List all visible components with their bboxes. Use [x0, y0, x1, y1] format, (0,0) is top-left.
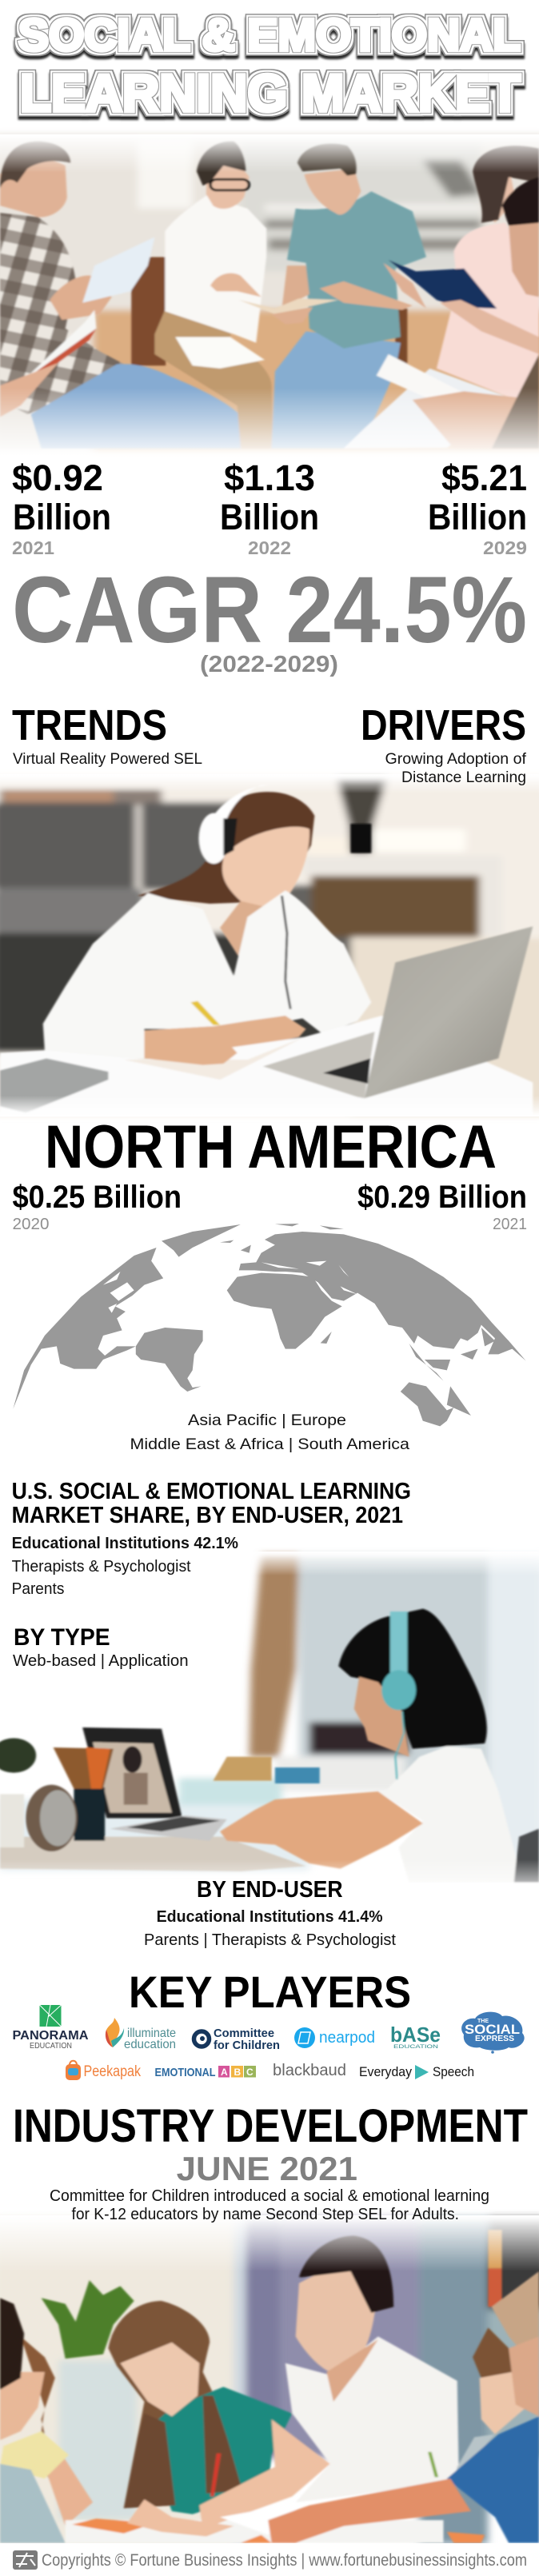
- stat: North America 2021: 2021: [493, 1216, 527, 1233]
- world map: [13, 1224, 526, 1426]
- left man: [0, 213, 138, 414]
- stat: 2022 market size: $1.13: [224, 457, 315, 498]
- stat: North America 2020: 2020: [13, 1216, 50, 1233]
- stat: 2021 market size: [12, 457, 111, 558]
- US share list: Parents: [12, 1580, 64, 1598]
- CAGR period: (2022-2029): [200, 652, 338, 677]
- by type list: Web-based | Application: [13, 1652, 189, 1670]
- stat: 2029 market size: $5.21: [441, 457, 527, 498]
- stat: 2021 market size: Billion: [13, 497, 111, 537]
- centre woman: [154, 310, 273, 449]
- stat: North America 2020: $0.25 Billion: [13, 1180, 182, 1215]
- logo: Emotional ABCs: C: [246, 2067, 254, 2078]
- logo: The Social Express: [461, 2012, 525, 2054]
- trends text: Virtual Reality Powered SEL: [13, 750, 202, 768]
- shirt: [43, 890, 371, 1061]
- US share list: Therapists & Psychologist: [12, 1558, 191, 1576]
- logo: Everyday Speech: Everyday: [359, 2064, 412, 2079]
- logo: Peekapak: [66, 2061, 141, 2080]
- stat: 2022 market size: 2022: [248, 537, 291, 558]
- logo: Illuminate Education: education: [124, 2038, 176, 2051]
- logo: Panorama Education: [13, 2005, 88, 2051]
- logo: The Social Express: EXPRESS: [475, 2035, 514, 2043]
- logo: Emotional ABCs: EMOTIONAL: [155, 2066, 216, 2079]
- photo: students reading in a circle: [0, 134, 539, 461]
- development description: Committee for Children introduced a social & emotional learning: [50, 2187, 489, 2205]
- other regions list: Middle East & Africa | South America: [130, 1436, 409, 1453]
- trends heading: TRENDS: [12, 701, 167, 749]
- logo: The Social Express: THE: [477, 2019, 489, 2024]
- boy and foreground: [473, 2327, 512, 2378]
- logo: Peekapak: Peekapak: [83, 2063, 141, 2080]
- logo: Illuminate Education: [106, 2018, 176, 2051]
- logo: Blackbaud: blackbaud: [273, 2062, 346, 2079]
- hair: [138, 792, 314, 904]
- by end-user heading: BY END-USER: [197, 1877, 343, 1903]
- other regions list: Asia Pacific | Europe: [188, 1412, 346, 1429]
- photo: teacher with children drawing: [0, 2215, 539, 2576]
- photo: woman with headphones at laptop: [0, 774, 539, 1116]
- stat: North America 2021: [357, 1180, 527, 1233]
- by end-user list: [144, 1908, 396, 1949]
- logo: Emotional ABCs: A: [221, 2067, 228, 2078]
- stat: 2021 market size: $0.92: [12, 457, 103, 498]
- stat: 2029 market size: [428, 457, 527, 558]
- logo: Committee for Children: Committee: [214, 2027, 274, 2040]
- development description: [50, 2187, 489, 2223]
- logo: Illuminate Education: illuminate: [127, 2027, 176, 2040]
- stat: 2029 market size: Billion: [428, 497, 527, 537]
- logo: Everyday Speech: [359, 2064, 474, 2079]
- US share list: [12, 1535, 238, 1598]
- girl: [108, 2301, 241, 2508]
- logo: Committee for Children: for Children: [214, 2039, 280, 2052]
- stat: 2029 market size: 2029: [483, 537, 527, 558]
- development description: for K-12 educators by name Second Step SEL for Adults.: [72, 2206, 459, 2223]
- stat: 2022 market size: Billion: [220, 497, 319, 537]
- title: SOCIAL & EMOTIONAL: [18, 10, 521, 61]
- headphones: [203, 785, 275, 861]
- teacher: [285, 2336, 459, 2502]
- hands: [145, 1016, 306, 1065]
- footer logo: [13, 2550, 38, 2570]
- logo: The Social Express: SOCIAL: [465, 2022, 520, 2037]
- stat: North America 2021: $0.29 Billion: [357, 1180, 527, 1215]
- US market share heading: U.S. SOCIAL & EMOTIONAL LEARNING: [12, 1479, 411, 1504]
- development date: JUNE 2021: [177, 2150, 357, 2187]
- by end-user list: Educational Institutions 41.4%: [157, 1908, 383, 1926]
- drivers text: Distance Learning: [401, 769, 526, 786]
- title: [18, 10, 521, 122]
- US share list: Educational Institutions 42.1%: [12, 1535, 238, 1552]
- table: [0, 1016, 533, 1116]
- by end-user list: Parents | Therapists & Psychologist: [144, 1931, 396, 1949]
- stat: 2021 market size: 2021: [12, 537, 54, 558]
- other regions list: [130, 1412, 409, 1453]
- key players heading: KEY PLAYERS: [129, 1967, 411, 2017]
- drivers text: Growing Adoption of: [385, 750, 527, 768]
- logo: Emotional ABCs: B: [234, 2067, 242, 2078]
- logo: Committee for Children: [194, 2027, 280, 2052]
- logo: Everyday Speech: Speech: [433, 2064, 474, 2079]
- centre man: [272, 331, 401, 449]
- stat: 2022 market size: [220, 457, 319, 558]
- logo: Nearpod: [294, 2027, 375, 2048]
- logo: Base Education: EDUCATION: [393, 2045, 438, 2050]
- right woman: [437, 223, 539, 400]
- face: [222, 827, 309, 913]
- logo: Panorama Education: EDUCATION: [30, 2042, 72, 2051]
- US market share heading: MARKET SHARE, BY END-USER, 2021: [12, 1503, 403, 1528]
- by type heading: BY TYPE: [14, 1624, 110, 1651]
- logo: Panorama Education: PANORAMA: [13, 2029, 88, 2043]
- logo: Base Education: bASe: [390, 2023, 441, 2047]
- drivers text: [385, 750, 527, 786]
- logo: Nearpod: nearpod: [319, 2029, 375, 2047]
- title: LEARNING MARKET: [20, 63, 521, 122]
- photo: girl with teal headphones studying: [0, 1552, 539, 1899]
- US market share heading: [12, 1479, 411, 1528]
- stat: North America 2020: [13, 1180, 182, 1233]
